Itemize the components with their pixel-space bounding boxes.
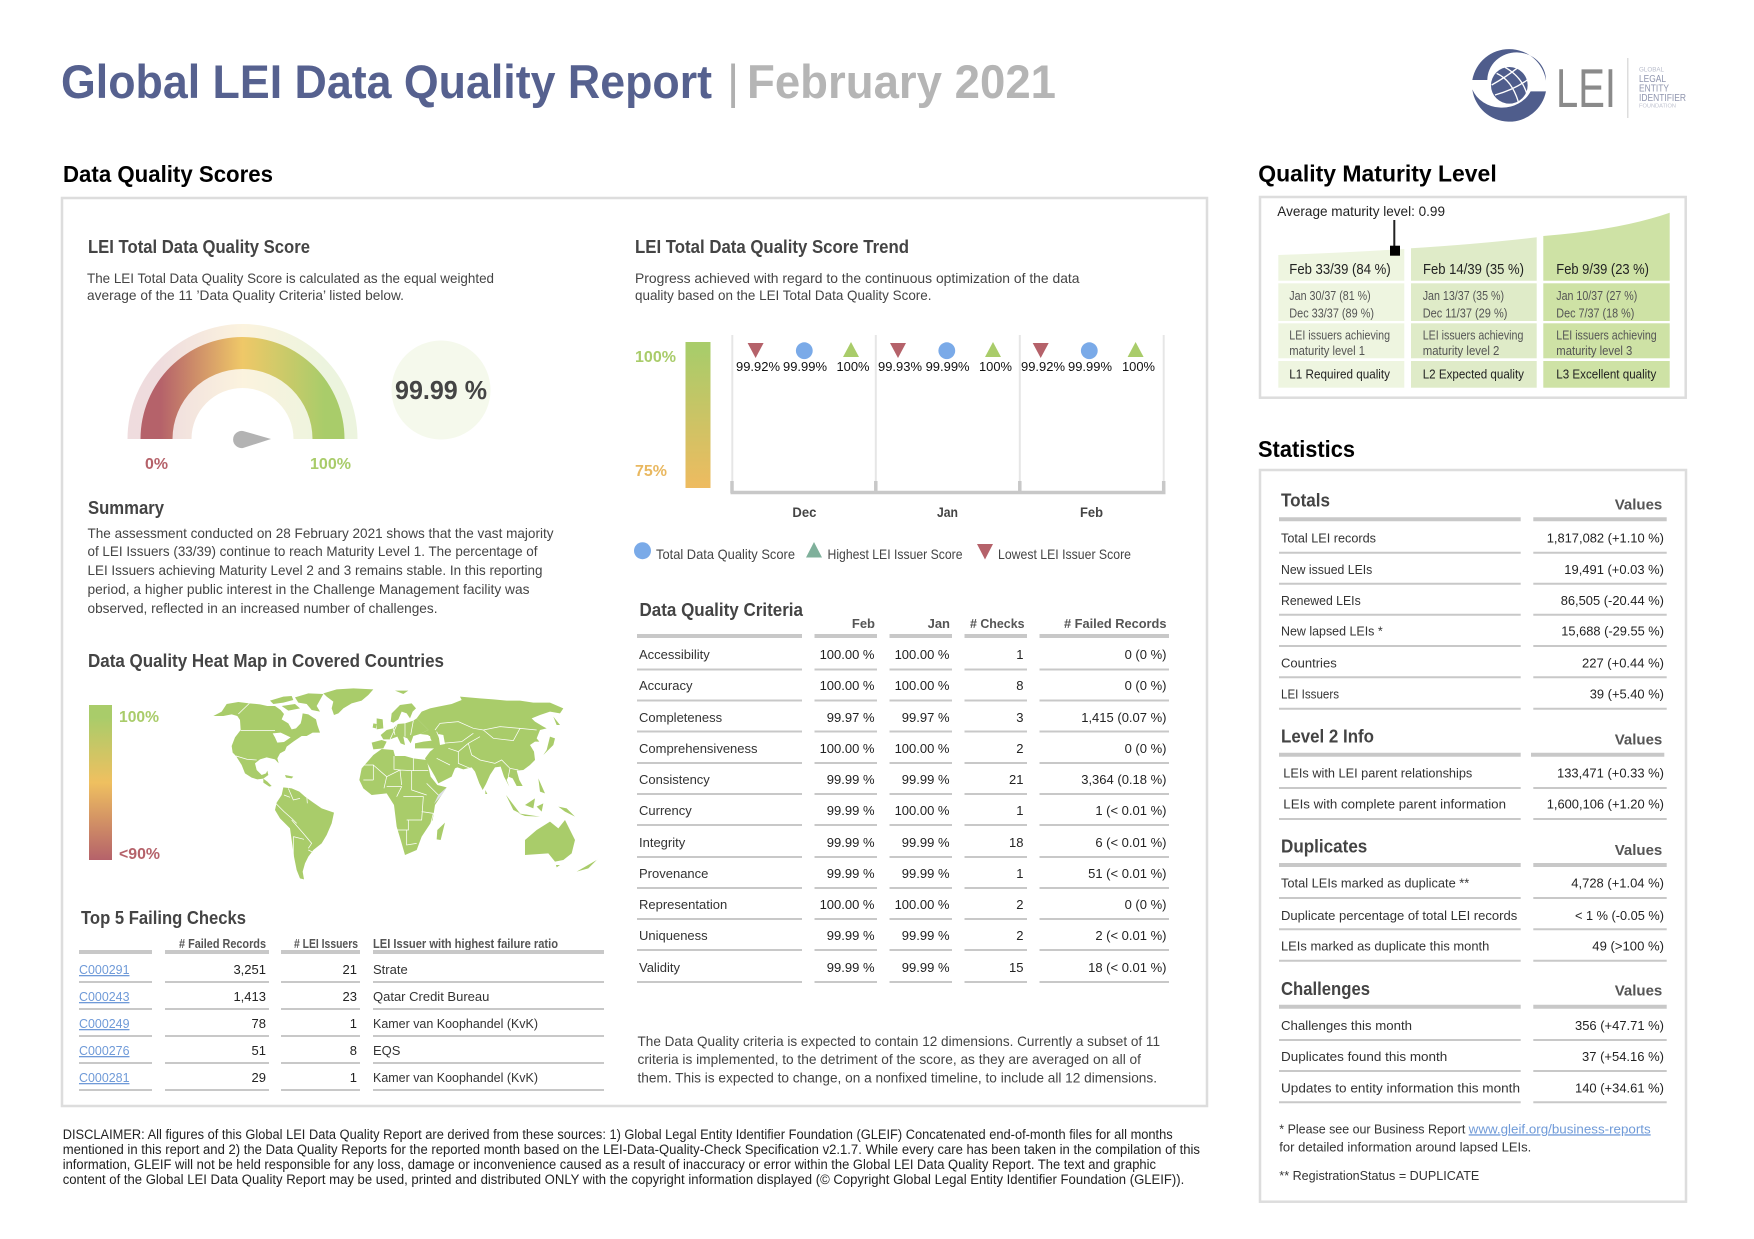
column: level 1: Feb 33/39 (84 %) [1289, 262, 1391, 278]
top 5 rows: 51 [252, 1043, 266, 1058]
criteria rows: Accessibility [639, 647, 710, 662]
criteria rows: 100.00 % [895, 897, 950, 912]
trend scale: 75% [635, 463, 667, 480]
logo: GLOBAL [1639, 68, 1665, 74]
column: level 2: L2 Expected quality [1423, 366, 1524, 381]
panel: data quality scores [62, 198, 1207, 1106]
total score description: The LEI Total Data Quality Score is calculated as the equal weighted [87, 270, 494, 286]
criteria rows: 100.00 % [820, 647, 875, 662]
summary text: of LEI Issuers (33/39) continue to reach Maturity Level 1. The percentage of [88, 543, 538, 559]
criteria note [638, 1033, 1160, 1086]
criteria rows: Completeness [639, 710, 723, 725]
stats: challenges [1281, 978, 1664, 1096]
heading: statistics: Statistics [1258, 436, 1355, 462]
criteria rows: 15 [1009, 960, 1024, 975]
column: level 2: Dec 11/37 (29 %) [1423, 306, 1507, 320]
markers: feb [1021, 342, 1155, 374]
asia [415, 697, 563, 790]
markers: jan: 99.93% [878, 359, 922, 374]
criteria rows: 1,415 (0.07 %) [1081, 710, 1166, 725]
criteria rows: 99.99 % [827, 928, 875, 943]
score badge: 99.99 % [395, 375, 487, 405]
panel: statistics [1260, 470, 1686, 1202]
stats: totals: Totals [1281, 490, 1330, 511]
criteria rows: Comprehensiveness [639, 741, 758, 756]
stats: totals: 15,688 (-29.55 %) [1561, 624, 1664, 639]
section: summary [88, 497, 554, 616]
criteria header: Jan [928, 616, 950, 631]
title: Global LEI Data Quality Report [61, 55, 712, 108]
criteria rows: 2 [1016, 928, 1024, 943]
stats: level 2 info: LEIs with LEI parent relationships [1283, 765, 1473, 780]
stats: duplicates [1281, 836, 1664, 954]
criteria rows: 6 (< 0.01 %) [1095, 835, 1166, 850]
criteria rows: Integrity [639, 835, 686, 850]
top 5 rows: 21 [343, 962, 357, 977]
criteria rows: 18 [1009, 835, 1024, 850]
total score description [87, 270, 494, 303]
trend scale: 100% [635, 349, 676, 366]
stats footnotes: ** RegistrationStatus = DUPLICATE [1279, 1168, 1480, 1183]
heat map legend: 100% [119, 709, 159, 726]
axis labels: Dec [792, 504, 817, 520]
stats: totals: 86,505 (-20.44 %) [1561, 593, 1664, 608]
heading: summary: Summary [88, 497, 165, 518]
stats: totals: 1,817,082 (+1.10 %) [1547, 531, 1664, 546]
criteria rows: 1 (< 0.01 %) [1095, 803, 1166, 818]
criteria rows: 21 [1009, 772, 1024, 787]
trend legend [634, 542, 1131, 562]
criteria rows: 99.99 % [827, 835, 875, 850]
criteria rows [639, 647, 1166, 975]
criteria rows: 100.00 % [895, 741, 950, 756]
criteria rows: 2 [1016, 897, 1024, 912]
column: level 1: Dec 33/37 (89 %) [1289, 306, 1374, 320]
country borders [236, 703, 537, 877]
trend legend: Total Data Quality Score [656, 546, 795, 562]
column: level 2 [1411, 237, 1537, 388]
top 5 rows: 1,413 [233, 989, 266, 1004]
criteria rows: 1 [1016, 803, 1024, 818]
panel: quality maturity level [1260, 197, 1686, 398]
top 5 rows [79, 962, 538, 1085]
criteria rows: 99.97 % [827, 710, 875, 725]
criteria rows: Validity [639, 960, 680, 975]
stats: totals: New issued LEIs [1281, 562, 1373, 577]
criteria rows: 99.99 % [827, 803, 875, 818]
criteria rows: 18 (< 0.01 %) [1088, 960, 1166, 975]
criteria rows: 99.99 % [902, 772, 950, 787]
disclaimer: mentioned in this report and 2) the Data Quality Reports for the reported month based on the LEI-Data-Quality-Check Specification v2.1.7. While every care has been taken in the compilation of this [63, 1142, 1200, 1157]
logo: LEGAL [1639, 74, 1666, 85]
criteria header: # Checks [970, 616, 1024, 631]
stats: duplicates: 49 (>100 %) [1592, 939, 1664, 954]
stats: challenges: Updates to entity information this month [1281, 1081, 1520, 1096]
heading: trend: LEI Total Data Quality Score Trend [635, 236, 909, 257]
title: February 2021 [747, 55, 1056, 108]
criteria rows: 100.00 % [895, 678, 950, 693]
column: level 3: Jan 10/37 (27 %) [1556, 289, 1637, 303]
heading: total score: LEI Total Data Quality Score [88, 236, 310, 257]
top 5 rows: C000291 [79, 962, 130, 977]
criteria rows: Consistency [639, 772, 710, 787]
disclaimer: DISCLAIMER: All figures of this Global LEI Data Quality Report are derived from these sources: 1) Global Legal Entity Identifier Foundation (GLEIF) Concatenated end-of-month files for all months [63, 1127, 1173, 1142]
column: level 2: LEI issuers achieving [1423, 328, 1523, 342]
markers: feb: 99.99% [1068, 359, 1112, 374]
heading: data quality scores: Data Quality Scores [63, 161, 273, 187]
criteria rows: 0 (0 %) [1125, 678, 1166, 693]
column: level 2: Jan 13/37 (35 %) [1423, 289, 1504, 303]
criteria rows: 2 (< 0.01 %) [1095, 928, 1166, 943]
top 5 rows: 3,251 [233, 962, 266, 977]
criteria rows: 99.99 % [827, 866, 875, 881]
stats: duplicates: Total LEIs marked as duplicate ** [1281, 876, 1469, 891]
criteria rows: 99.99 % [902, 835, 950, 850]
top 5 rows: Kamer van Koophandel (KvK) [373, 1016, 538, 1031]
markers: dec: 99.99% [783, 359, 827, 374]
criteria rows: 100.00 % [895, 647, 950, 662]
criteria rows: 0 (0 %) [1125, 647, 1166, 662]
top 5 rows: C000281 [79, 1070, 130, 1085]
stats: totals: 227 (+0.44 %) [1582, 656, 1664, 671]
table: top 5 failing checks [79, 907, 604, 1090]
stats: challenges: Duplicates found this month [1281, 1049, 1447, 1064]
criteria rows: 99.97 % [902, 710, 950, 725]
stats: level 2 info [1281, 726, 1664, 811]
markers: feb: 99.92% [1021, 359, 1065, 374]
criteria rows: 100.00 % [820, 741, 875, 756]
column: level 1: Jan 30/37 (81 %) [1289, 289, 1371, 303]
criteria rows: 99.99 % [902, 960, 950, 975]
stats: totals: 39 (+5.40 %) [1590, 687, 1664, 702]
gauge chart: 100% [310, 456, 351, 473]
criteria header: # Failed Records [1064, 616, 1166, 631]
stats: challenges: 140 (+34.61 %) [1575, 1081, 1664, 1096]
section: total score [87, 236, 494, 473]
criteria rows: 3 [1016, 710, 1024, 725]
markers: dec: 99.92% [736, 359, 780, 374]
stats: challenges: Values [1615, 983, 1662, 1000]
title [61, 55, 1056, 108]
markers: dec [736, 342, 870, 374]
column: level 1: L1 Required quality [1289, 366, 1390, 381]
stats footnotes: for detailed information around lapsed LEIs. [1279, 1140, 1531, 1155]
stats: duplicates: Duplicate percentage of total LEI records [1281, 908, 1518, 923]
trend legend: Highest LEI Issuer Score [828, 546, 963, 562]
summary text: period, a higher public interest in the Challenge Management facility was [88, 581, 530, 597]
stats: totals: Total LEI records [1281, 531, 1376, 546]
top 5 rows: Qatar Credit Bureau [373, 989, 489, 1004]
trend legend: Lowest LEI Issuer Score [998, 546, 1131, 562]
oceania [525, 820, 575, 862]
top 5 rows: C000249 [79, 1016, 130, 1031]
summary text: observed, reflected in an increased number of challenges. [88, 600, 438, 616]
stats footnotes: www.gleif.org/business-reports [1468, 1121, 1651, 1136]
top 5 rows: Strate [373, 962, 408, 977]
stats: duplicates: Duplicates [1281, 836, 1367, 857]
trend chart [730, 335, 1166, 520]
trend scale [635, 342, 710, 488]
column: level 3 [1543, 213, 1670, 388]
top 5 header: # Failed Records [179, 937, 266, 951]
criteria rows: 3,364 (0.18 %) [1081, 772, 1166, 787]
stats footnotes [1279, 1121, 1651, 1183]
top 5 header: LEI Issuer with highest failure ratio [373, 937, 558, 951]
criteria rows: Provenance [639, 866, 708, 881]
criteria rows: Accuracy [639, 678, 693, 693]
gauge chart: 0% [145, 456, 168, 473]
summary text: LEI Issuers achieving Maturity Level 2 and 3 remains stable. In this reporting [88, 562, 542, 578]
axis labels: Jan [937, 504, 958, 520]
stats footnotes: * Please see our Business Report [1279, 1121, 1466, 1136]
criteria rows: 1 [1016, 647, 1024, 662]
africa [359, 749, 447, 855]
stats: level 2 info: 1,600,106 (+1.20 %) [1547, 796, 1664, 811]
top 5 rows: 78 [252, 1016, 266, 1031]
lakes and seas [273, 733, 445, 745]
heading: top 5: Top 5 Failing Checks [81, 907, 246, 928]
stats: challenges: Challenges [1281, 978, 1370, 999]
south america [275, 787, 334, 879]
criteria rows: Uniqueness [639, 928, 708, 943]
top 5 rows: 8 [350, 1043, 357, 1058]
column: level 1 [1278, 249, 1404, 388]
stats: challenges: Challenges this month [1281, 1018, 1412, 1033]
criteria rows: 2 [1016, 741, 1024, 756]
markers: dec: 100% [836, 359, 870, 374]
section: heat map [88, 650, 598, 879]
disclaimer: information, GLEIF will not be held responsible for any loss, damage or inconvenience caused as a result of inaccuracy or error within the Global LEI Data Quality Report. The text and graphic [63, 1157, 1156, 1172]
criteria rows: 99.99 % [902, 866, 950, 881]
logo: ENTITY [1639, 84, 1669, 94]
markers: feb: 100% [1122, 359, 1155, 374]
stats: duplicates: < 1 % (-0.05 %) [1575, 908, 1664, 923]
axis labels [792, 504, 1103, 520]
criteria rows: 99.99 % [827, 960, 875, 975]
stats: totals: 19,491 (+0.03 %) [1564, 562, 1664, 577]
score badge [392, 340, 490, 440]
summary text: The assessment conducted on 28 February 2021 shows that the vast majority [88, 525, 554, 541]
heat map legend [89, 705, 160, 863]
criteria note: them. This is expected to change, on a nonfixed timeline, to include all 12 dimensions. [638, 1070, 1157, 1086]
stats: duplicates: LEIs marked as duplicate this month [1281, 939, 1489, 954]
criteria rows: 99.99 % [902, 928, 950, 943]
section: trend [634, 236, 1166, 562]
world map [213, 688, 598, 879]
total score description: average of the 11 ’Data Quality Criteria’ listed below. [87, 287, 404, 303]
criteria rows: 8 [1016, 678, 1024, 693]
heat map legend: <90% [119, 846, 160, 863]
trend description [635, 270, 1080, 303]
criteria note: criteria is implemented, to the detriment of the score, as they are averaged on all of [638, 1051, 1141, 1067]
markers: jan: 99.99% [926, 359, 970, 374]
title: | [727, 55, 739, 108]
trend description: Progress achieved with regard to the continuous optimization of the data [635, 270, 1080, 286]
criteria rows: 1 [1016, 866, 1024, 881]
criteria rows: Currency [639, 803, 692, 818]
markers: jan [878, 342, 1012, 374]
top 5 rows: 1 [350, 1016, 357, 1031]
criteria header: Feb [852, 616, 875, 631]
column: level 1: LEI issuers achieving [1289, 328, 1390, 342]
stats: level 2 info: Level 2 Info [1281, 726, 1374, 747]
column: level 3: Feb 9/39 (23 %) [1556, 262, 1649, 278]
criteria rows: 99.99 % [827, 772, 875, 787]
stats: totals: LEI Issuers [1281, 687, 1339, 702]
column: level 3: LEI issuers achieving [1556, 328, 1657, 342]
disclaimer [63, 1127, 1200, 1187]
top 5 rows: C000276 [79, 1043, 130, 1058]
criteria note: The Data Quality criteria is expected to contain 12 dimensions. Currently a subset of 11 [638, 1033, 1160, 1049]
criteria header [852, 616, 1166, 631]
top 5 rows: 1 [350, 1070, 357, 1085]
somalia, no data [434, 787, 447, 804]
heading: quality maturity level: Quality Maturity Level [1258, 161, 1497, 187]
markers: jan: 100% [979, 359, 1012, 374]
column: level 2: maturity level 2 [1423, 344, 1499, 358]
logo: IDENTIFIER [1639, 93, 1686, 104]
europe [381, 718, 428, 745]
top 5 rows: 29 [252, 1070, 266, 1085]
stats: level 2 info: Values [1615, 731, 1662, 748]
column: level 3: Dec 7/37 (18 %) [1556, 306, 1634, 320]
logo: FOUNDATION [1639, 104, 1676, 110]
column: level 1: maturity level 1 [1289, 344, 1365, 358]
top 5 rows: 23 [343, 989, 357, 1004]
axis labels: Feb [1080, 504, 1103, 520]
stats: duplicates: Values [1615, 842, 1662, 859]
criteria rows: Representation [639, 897, 727, 912]
criteria rows: 100.00 % [895, 803, 950, 818]
stats: totals [1281, 490, 1664, 702]
top 5 header: # LEI Issuers [294, 937, 358, 951]
average maturity marker: Average maturity level: 0.99 [1277, 203, 1445, 219]
trend description: quality based on the LEI Total Data Quality Score. [635, 287, 932, 303]
criteria rows: 0 (0 %) [1125, 741, 1166, 756]
top 5 rows: Kamer van Koophandel (KvK) [373, 1070, 538, 1085]
logo: LEI [1556, 57, 1616, 119]
heading: criteria: Data Quality Criteria [640, 599, 804, 620]
top 5 rows: EQS [373, 1043, 401, 1058]
summary text [88, 525, 554, 616]
maturity pointer [1390, 220, 1400, 256]
column: level 3: maturity level 3 [1556, 344, 1632, 358]
stats: totals: Countries [1281, 656, 1337, 671]
stats: totals: Renewed LEIs [1281, 593, 1361, 608]
column: level 3: L3 Excellent quality [1556, 366, 1657, 381]
stats: challenges: 37 (+54.16 %) [1582, 1049, 1664, 1064]
heading: heat map: Data Quality Heat Map in Covered Countries [88, 650, 444, 671]
north america [213, 702, 320, 779]
top 5 header [179, 937, 558, 951]
stats: duplicates: 4,728 (+1.04 %) [1571, 876, 1664, 891]
criteria rows: 0 (0 %) [1125, 897, 1166, 912]
stats: totals: New lapsed LEIs * [1281, 624, 1383, 639]
column: level 2: Feb 14/39 (35 %) [1423, 262, 1524, 278]
criteria rows: 100.00 % [820, 678, 875, 693]
stats: totals: Values [1615, 496, 1662, 513]
logo [1472, 49, 1686, 122]
stats: level 2 info: LEIs with complete parent information [1283, 796, 1506, 811]
stats: challenges: 356 (+47.71 %) [1575, 1018, 1664, 1033]
criteria rows: 100.00 % [820, 897, 875, 912]
disclaimer: content of the Global LEI Data Quality Report may be used, printed and distributed ONLY with the copyright information displayed (© Copyright Global Legal Entity Identifier Foundation (GLEIF)). [63, 1172, 1184, 1187]
gauge chart [128, 324, 358, 473]
stats: level 2 info: 133,471 (+0.33 %) [1557, 765, 1664, 780]
criteria rows: 51 (< 0.01 %) [1088, 866, 1166, 881]
table: data quality criteria [637, 599, 1169, 1086]
top 5 rows: C000243 [79, 989, 130, 1004]
